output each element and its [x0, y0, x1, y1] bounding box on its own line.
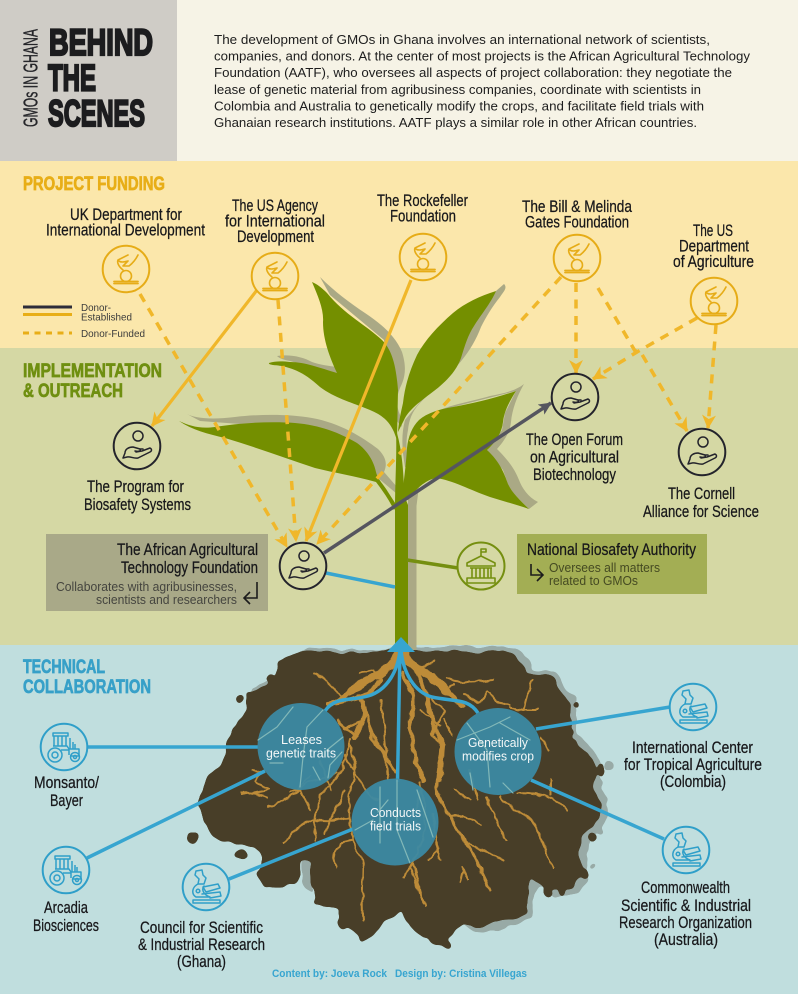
- icon: US Department of Agriculture: [691, 278, 737, 324]
- label: UK Department for International Development: [46, 205, 205, 240]
- label: Monsanto/Bayer: [34, 773, 99, 810]
- heading: technical collaboration: COLLABORATION: [23, 677, 151, 698]
- arrowhead into the stem: [387, 637, 415, 652]
- background: header cream panel: [177, 0, 798, 161]
- credits: Design by: Cristina Villegas: [395, 968, 527, 980]
- icon: UK Department for International Development: [103, 246, 149, 292]
- icon: Program for Biosafety Systems: [114, 423, 160, 469]
- label: Open Forum on Agricultural Biotechnology: The Open Forum: [526, 430, 623, 449]
- legend: Established: [81, 312, 132, 324]
- plant: [179, 277, 538, 650]
- bubble: conducts field trials: Conducts: [370, 805, 421, 820]
- label: Cornell Alliance for Science: The Cornell: [668, 484, 735, 503]
- credits: Content by: Joeva Rock: [272, 968, 388, 980]
- callout: National Biosafety Authority: National Biosafety Authority: [527, 540, 696, 559]
- callout: African Agricultural Technology Foundation: Collaborates with agribusinesses,: [56, 579, 237, 594]
- intro text block: Ghanaian research institutions. AATF plays a similar role in other African countries.: [214, 115, 697, 130]
- label: Monsanto/Bayer: Bayer: [50, 791, 83, 810]
- label: International Center for Tropical Agriculture: for Tropical Agriculture: [624, 755, 762, 774]
- label: Commonwealth Scientific and Industrial Research Organization: Research Organization: [619, 913, 752, 932]
- heading: project funding: PROJECT FUNDING: [23, 174, 165, 195]
- legend: Donor-: [81, 302, 111, 314]
- label: Arcadia Biosciences: [33, 898, 99, 935]
- label: Commonwealth Scientific and Industrial Research Organization: [619, 878, 752, 949]
- icon: Gates Foundation: [554, 235, 600, 281]
- callout: National Biosafety Authority: related to GMOs: [549, 573, 638, 588]
- bubble: conducts field trials: [352, 778, 438, 866]
- label: Rockefeller Foundation: The Rockefeller: [377, 191, 468, 210]
- label: Bill and Melinda Gates Foundation: The Bill & Melinda: [522, 197, 632, 216]
- callout: African Agricultural Technology Foundation: The African Agricultural: [117, 540, 258, 559]
- label: Rockefeller Foundation: [377, 191, 468, 226]
- label: Open Forum on Agricultural Biotechnology: Biotechnology: [533, 465, 616, 484]
- bubble: leases genetic traits: Leases: [281, 732, 322, 747]
- title: [48, 22, 153, 134]
- icon: CSIR microscope: [183, 864, 229, 910]
- label: Council for Scientific and Industrial Research: Council for Scientific: [140, 918, 263, 937]
- label: US Department of Agriculture: [673, 221, 754, 271]
- roots: [240, 654, 567, 920]
- label: Council for Scientific and Industrial Research: & Industrial Research: [138, 935, 265, 954]
- title: BEHIND: [49, 22, 153, 63]
- heading: implementation and outreach: [23, 361, 162, 402]
- label: Program for Biosafety Systems: Biosafety Systems: [84, 495, 191, 514]
- label: Open Forum on Agricultural Biotechnology: [526, 430, 623, 484]
- intro text block: [214, 32, 751, 130]
- callout: African Agricultural Technology Foundation: Technology Foundation: [121, 558, 258, 577]
- blue arrow: three branches into the plant: [325, 650, 478, 782]
- callout: African Agricultural Technology Foundation: [46, 534, 268, 611]
- background: header grey panel: [0, 0, 177, 161]
- label: US Agency for International Development: The US Agency: [232, 196, 318, 215]
- bubble: genetically modifies crop: [454, 708, 542, 795]
- label: US Agency for International Development: [225, 196, 325, 246]
- icon: Open Forum: [552, 374, 598, 420]
- heading: implementation and outreach: & OUTREACH: [23, 381, 123, 402]
- label: Commonwealth Scientific and Industrial Research Organization: Scientific & Industrial: [621, 896, 751, 915]
- funding and implementation lines: [140, 277, 716, 587]
- icon: Arcadia tractor: [43, 847, 89, 893]
- label: Commonwealth Scientific and Industrial Research Organization: Commonwealth: [641, 878, 730, 897]
- bubble: leases genetic traits: [258, 703, 344, 790]
- heading: implementation and outreach: IMPLEMENTATION: [23, 361, 162, 382]
- label: US Agency for International Development: for International: [225, 212, 325, 230]
- label: Bill and Melinda Gates Foundation: [522, 197, 632, 232]
- label: Rockefeller Foundation: Foundation: [390, 206, 456, 226]
- title: THE: [48, 58, 96, 98]
- intro text block: lease of genetic material from agribusiness companies, coordinate with scientists in: [214, 82, 701, 97]
- label: Council for Scientific and Industrial Research: (Ghana): [177, 952, 226, 971]
- heading: technical collaboration: TECHNICAL: [23, 657, 105, 678]
- label: Arcadia Biosciences: Arcadia: [44, 898, 88, 917]
- title: SCENES: [48, 93, 145, 134]
- label: UK Department for International Development: UK Department for: [70, 205, 182, 224]
- panel: project funding band: [0, 161, 798, 348]
- label: UK Department for International Development: International Development: [46, 220, 205, 240]
- label: Commonwealth Scientific and Industrial Research Organization: (Australia): [654, 930, 718, 949]
- label: Program for Biosafety Systems: The Program for: [87, 477, 184, 496]
- soil with roots: [188, 646, 614, 950]
- label: Program for Biosafety Systems: [84, 477, 191, 514]
- panel: technical collaboration band: [0, 645, 798, 994]
- label: International Center for Tropical Agriculture: [624, 738, 762, 791]
- legend: Donor-Funded: [81, 328, 145, 340]
- bubble: genetically modifies crop: modifies crop: [462, 748, 534, 764]
- icon: Rockefeller Foundation: [400, 234, 446, 280]
- intro text block: Colombia and Australia to genetically modify the crops, and facilitate field trials with: [214, 98, 704, 113]
- panel: implementation and outreach band: [0, 348, 798, 645]
- intro text block: Foundation (AATF), who oversees all aspects of project collaboration: they negotiate the: [214, 65, 732, 80]
- heading: technical collaboration: [23, 657, 151, 698]
- bubble: leases genetic traits: genetic traits: [266, 746, 336, 760]
- icon: Cornell Alliance: [679, 429, 725, 475]
- label: Council for Scientific and Industrial Research: [138, 918, 265, 971]
- bubble: genetically modifies crop: Genetically: [468, 735, 528, 750]
- collaboration lines: [87, 707, 670, 879]
- label: Open Forum on Agricultural Biotechnology: on Agricultural: [530, 448, 619, 466]
- label: Bill and Melinda Gates Foundation: Gates Foundation: [525, 212, 629, 232]
- icon: national biosafety authority building: [458, 542, 504, 590]
- label: Cornell Alliance for Science: [643, 484, 759, 521]
- label: International Center for Tropical Agriculture: International Center: [632, 738, 753, 757]
- label: Cornell Alliance for Science: Alliance for Science: [643, 502, 759, 521]
- label: International Center for Tropical Agriculture: (Colombia): [660, 772, 726, 791]
- label: Monsanto/Bayer: Monsanto/: [34, 773, 99, 792]
- icon: CSIRO microscope: [663, 827, 709, 873]
- label: US Agency for International Development: Development: [237, 227, 314, 246]
- callout: African Agricultural Technology Foundation: scientists and researchers: [96, 592, 237, 607]
- callout: National Biosafety Authority: Oversees all matters: [549, 560, 660, 575]
- legend: [23, 302, 145, 340]
- bubble: conducts field trials: field trials: [370, 818, 421, 834]
- icon: CIAT microscope: [670, 684, 716, 730]
- label: US Department of Agriculture: of Agriculture: [673, 252, 754, 271]
- icon: African Agricultural Technology Foundation: [280, 543, 326, 589]
- credits: [272, 968, 527, 980]
- leaf shadows: [187, 277, 538, 650]
- icon: US Agency for International Development: [252, 253, 298, 299]
- intro text block: The development of GMOs in Ghana involves an international network of scientists,: [214, 32, 710, 47]
- leaves and stem: [179, 282, 529, 645]
- label: US Department of Agriculture: The US: [693, 221, 733, 240]
- intro text block: companies, and donors. At the center of most projects is the African Agricultural Technology: [214, 49, 751, 64]
- label: US Department of Agriculture: Department: [679, 236, 749, 256]
- icon: Monsanto tractor: [41, 724, 87, 770]
- callout: National Biosafety Authority: [517, 534, 707, 594]
- label: Arcadia Biosciences: Biosciences: [33, 916, 99, 935]
